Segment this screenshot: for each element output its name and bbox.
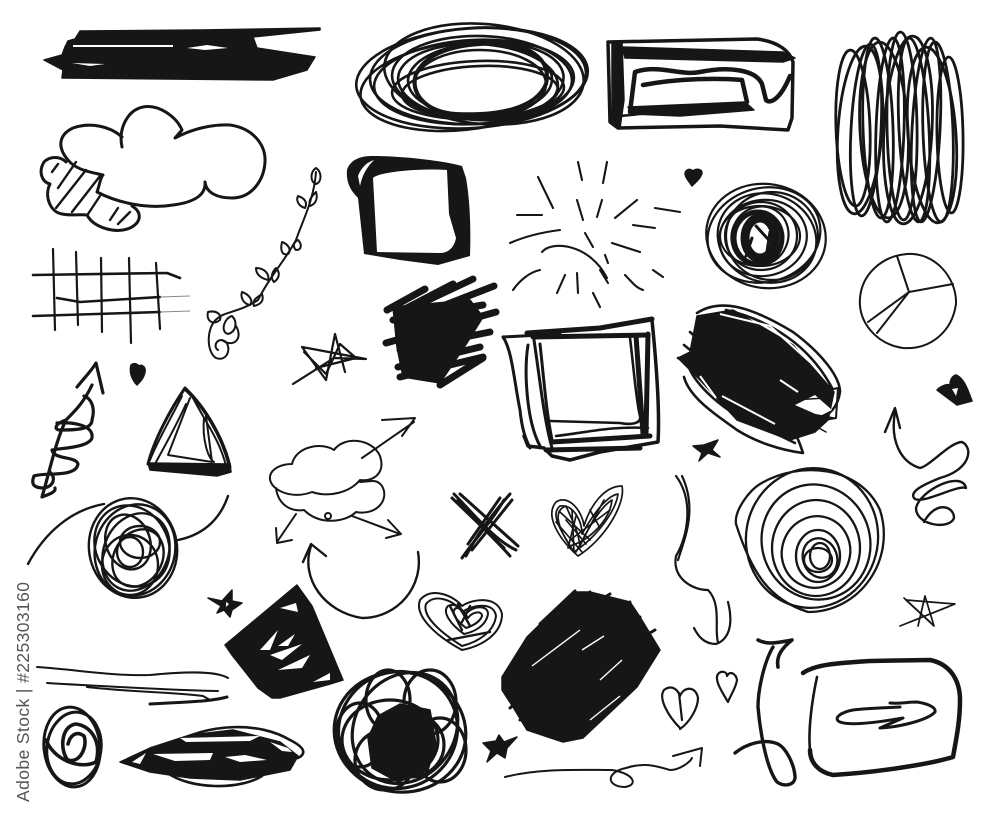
icon: scribbled heart <box>552 486 622 556</box>
icon: marker strokes top left <box>44 28 320 80</box>
icon: rounded box with arrow <box>803 660 960 775</box>
image credit text: Adobe Stock | #225303160 <box>13 582 33 802</box>
icon: solid scribble oval <box>678 305 840 453</box>
icon: spiral oval <box>40 704 106 790</box>
icon: burst of dashes <box>510 162 680 307</box>
icon: flat scribbled oval <box>120 727 303 786</box>
icon: vertical arrow with loop <box>735 640 795 785</box>
icon: curly arrow <box>885 408 968 525</box>
icon: cloud with hatched shadow <box>41 107 265 230</box>
icon: vine arrow <box>208 168 320 359</box>
icon: big black scribble patch <box>502 591 660 742</box>
icon: small star <box>693 440 720 461</box>
icon: small heart right <box>937 375 972 405</box>
icon: small heart left <box>130 364 145 385</box>
icon: spiral arrow <box>33 363 103 497</box>
icon: solid scribble patch <box>386 279 496 385</box>
icon: vertical scribble <box>832 32 964 225</box>
icon: black scribbled square <box>225 585 343 698</box>
icon: double heart scribble <box>419 593 502 650</box>
icon: outline star right <box>900 596 955 626</box>
icon: solid star bottom <box>483 735 517 762</box>
icon: hand-drawn grid <box>33 249 190 343</box>
icon: tangled ball <box>317 650 479 810</box>
icon: scribbled square frame <box>347 156 470 265</box>
icon: wavy arrow <box>675 476 730 644</box>
icon: sketchy square frame <box>503 319 659 460</box>
icon: pie chart circle <box>860 254 956 348</box>
icon: outline hearts <box>662 672 737 729</box>
icon: star one <box>293 334 366 384</box>
icon: long looping arrow <box>505 748 702 787</box>
icon: speed lines <box>37 667 228 704</box>
icon: small star center left <box>208 590 242 617</box>
icon: round scribble <box>697 174 834 298</box>
icon: scribbled triangle <box>148 388 231 476</box>
icon: cloud with arrows <box>270 418 419 618</box>
icon: concentric scribble circle <box>735 458 889 618</box>
icon: scribbled rectangle frame <box>608 39 795 130</box>
icon: scribble ball with trailing lines <box>28 491 228 605</box>
icon: scribbled oval ring <box>353 15 591 140</box>
icon: small heart top <box>685 169 702 186</box>
icon: scribbled X <box>452 494 518 558</box>
